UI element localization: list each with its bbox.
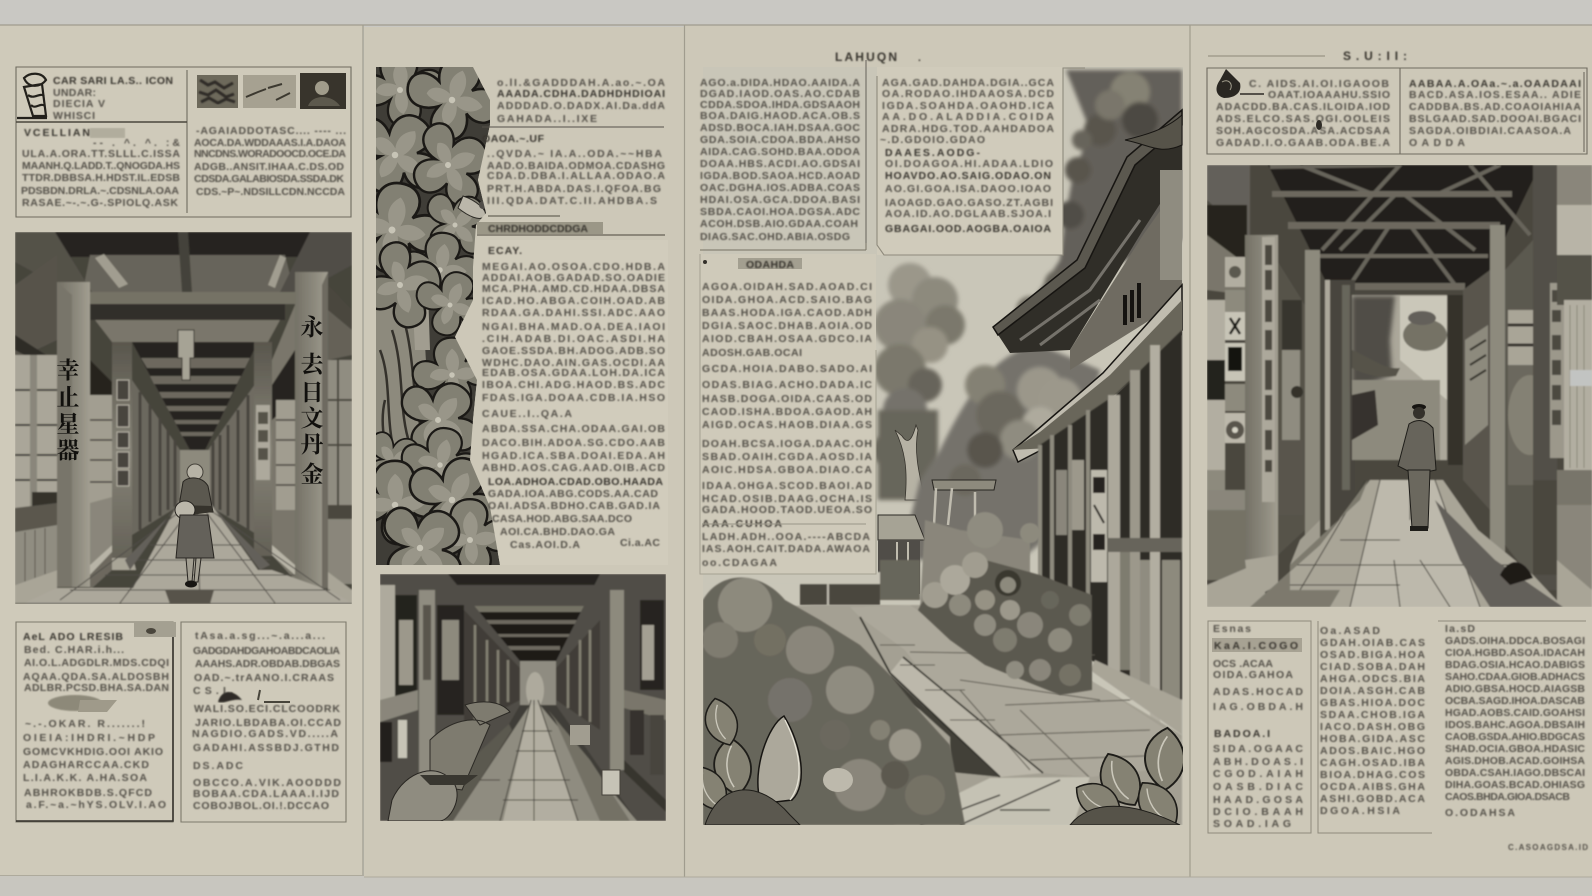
text block: left column: PDSBDN.DRLA.~.CDSNLA.OAA (21, 185, 179, 197)
pillar calligraphy right: 永 (300, 314, 324, 340)
text block: top left: OAAT.IOAAAHU.SSIO (1268, 89, 1390, 101)
temple facade (1040, 330, 1182, 735)
text block: top left: GADAD.I.O.GAAB.ODA.BE.A (1216, 137, 1390, 149)
text block: lower column one: ABH.DOAS.I (1213, 756, 1303, 768)
panel 3 text box left column: ADSD.BOCA.IAH.DSAA.GOC (700, 122, 860, 134)
panel 3 text box upper right: AGA.GAD.DAHDA.DGIA..GCA (882, 77, 1054, 89)
text block: lower column: OIDA.GHOA.ACD.SAIO.BAG (702, 294, 872, 306)
text block: lower column two: BIOA.DHAG.COS (1320, 769, 1425, 781)
roof lower (1012, 285, 1182, 462)
tree cluster middle (900, 345, 1100, 560)
panel 1 lower text boxes (16, 622, 346, 822)
text block: left column: ULA.A.ORA.TT.SLLL.C.ISSA (22, 148, 180, 160)
text block: lower column three: SAHO.CDAA.GIOB.ADHACS (1445, 671, 1585, 683)
text block: lower column one: BADOA.I (1214, 728, 1270, 740)
text block: lower left column: a.F.~a.~hYS.OLV.I.AO (26, 799, 166, 811)
panel 3 text box upper right: AA.DO.ALADDIA.COIDA (882, 111, 1054, 123)
gray heading bar (477, 222, 665, 235)
text block: section two: NGAI.BHA.MAD.OA.DEA.IAOI (482, 321, 665, 333)
heading block: panel 1: DIECIA V (53, 98, 105, 110)
panel 3 text box upper right: HOAVDO.AO.SAIG.ODAO.ON (885, 170, 1051, 182)
gray heading bar: CHRDHODDCDDGA (488, 223, 588, 235)
text block: lower column: IAS.AOH.CAIT.DADA.AWAOA (702, 543, 870, 555)
text block: section one: III.QDA.DAT.C.II.AHDBA.S (487, 195, 657, 207)
panel 3 text box upper right: ~.D.GDOIO.GDAO (880, 134, 985, 146)
text block: lower column three: CAOB.GSDA.AHIO.BDGCAS (1445, 731, 1585, 743)
text block: lower column: AIGD.OCAS.HAOB.DIAA.GS (702, 419, 872, 431)
heading block: panel 1 (53, 75, 173, 122)
text block: lower column: oo.CDAGAA (702, 557, 777, 569)
text block: lower column three: IDOS.BAHC.AGOA.DBSAIH (1445, 719, 1585, 731)
footer caption: C.ASOAGDSA.ID (1508, 843, 1588, 852)
text block: top left: ADACDD.BA.CAS.ILOIDA.IOD (1216, 101, 1390, 113)
shrubs by temple (918, 512, 1092, 695)
text block: lower right column (192, 630, 341, 812)
text block: lower column two: AHGA.ODCS.BIA (1320, 673, 1425, 685)
text block: section two: IBOA.CHI.ADG.HAOD.BS.ADC (482, 379, 665, 391)
text block: top left: C. AIDS.AI.OI.IGAOOB (1249, 78, 1389, 90)
text block: section one: ..QVDA.~ IA.A..ODA.~~HBA (487, 148, 662, 160)
text block: lower right column: OBCCO.A.VIK.AOODDD (193, 777, 341, 789)
panel 3 text box left column: ACOH.DSB.AIO.GDAA.COAH (700, 218, 858, 230)
panel 3 text box upper right: GBAGAI.OOD.AOGBA.OAIOA (885, 223, 1051, 235)
text block: lower column three: ADIO.GBSA.HOCD.AIAGSB (1445, 683, 1585, 695)
pillar calligraphy left (56, 358, 80, 463)
text block: right column: AOCA.DA.WDDAAAS.I.A.DAOA (194, 137, 346, 149)
text block: lower column three: O.ODAHSA (1445, 807, 1515, 819)
panel 3 text box left column: DGAD.IAOD.OAS.AO.CDAB (700, 88, 860, 100)
text block: section two: GAOE.SSDA.BH.ADOG.ADB.SO (482, 345, 665, 357)
icon: flower cluster (376, 67, 498, 565)
text block: lower left column: L.I.A.K.K. A.HA.SOA (23, 772, 147, 784)
text block: lower column: GADA.HOOD.TAOD.UEOA.SO (702, 504, 872, 516)
text block: lower column two: OSAD.BIGA.HOA (1320, 649, 1425, 661)
text block: section one: AAD.O.BAIDA.ODMOA.CDASHG (487, 160, 665, 172)
panel 3 text box upper right: ADRA.HDG.TOD.AAHDADOA (882, 123, 1054, 135)
heading bar: ODAHDA (746, 259, 794, 271)
text block: section two: DACO.BIH.ADOA.SG.CDO.AAB (482, 437, 665, 449)
text block: lower column three: AGIS.DHOB.ACAD.GOIHSA (1445, 755, 1585, 767)
text block: lower right column: CS.I. (193, 685, 233, 697)
text block: intro: ADDDAD.O.DADX.AI.Da.ddA (497, 100, 665, 112)
text block: lower column two: IACO.DASH.OBG (1320, 721, 1425, 733)
text block: lower column one: DCIO.BAAH (1213, 806, 1303, 818)
text block: lower column: SBAD.OAIH.CGDA.AOSD.IA (702, 451, 872, 463)
text block: lower column three: BDAG.OSIA.HCAO.DABIGS (1445, 659, 1585, 671)
text block: right column: CDS.~P~.NDSILLCDN.NCCDA (196, 186, 345, 198)
heading block: panel 1: WHISCI (53, 110, 95, 122)
text block: section two: CAUE..I..QA.A (482, 408, 572, 420)
panel 3 text box left column: HDAI.OSA.GCA.DDOA.BASI (700, 194, 860, 206)
text block: top right: BSLGAAD.SAD.DOOAI.BGACI (1409, 113, 1581, 125)
text block: lower column one: OIDA.GAHOA (1213, 669, 1293, 681)
text block: right column: NNCDNS.WORADOOCD.OCE.DA (194, 148, 346, 160)
text block: section two: ADDAI.AOB.GADAD.SO.OADIE (482, 272, 665, 284)
panel 3 text box left column: SBDA.CAOI.HOA.DGSA.ADC (700, 206, 860, 218)
text block: lower column: IDAA.OHGA.SCOD.BAOI.AD (702, 480, 872, 492)
text block: lower left column: OIEIA:IHDRI.~HDP (23, 732, 155, 744)
panel 3 text box left column: CDDA.SDOA.IHDA.GDSAAOH (700, 99, 860, 111)
text block: lower left column: AI.O.L.ADGDLR.MDS.CDQI (24, 657, 169, 669)
roof upper (993, 110, 1182, 370)
text block: top left (1216, 78, 1390, 149)
text block: left column: RASAE.~-.~.G-.SPIOLQ.ASK (22, 197, 178, 209)
text block: lower column three: OBDA.CSAH.IAGO.DBSCAI (1445, 767, 1585, 779)
heading: section two: ECAY. (488, 245, 522, 257)
text block: lower column one: ADAS.HOCAD (1213, 686, 1303, 698)
text block: lower column: DGIA.SAOC.DHAB.AOIA.OD (702, 320, 872, 332)
text block: section one (487, 148, 665, 216)
text block: top left: SOH.AGCOSDA.ASA.ACDSAA (1216, 125, 1390, 137)
text block: lower column two (1320, 625, 1425, 817)
text block: section two: ICAD.HO.ABGA.COIH.OAD.AB (482, 295, 665, 307)
text block: lower right column: GADGDAHDGAHOABDCAOLIA (193, 645, 340, 657)
text block: lower left column: Bed. C.HAR.i.h... (24, 644, 124, 656)
text block: left column: TTDR.DBBSA.H.HDST.IL.EDSB (22, 172, 180, 184)
text block: left column: VCELLIAN (24, 127, 90, 139)
pillar calligraphy right: 日 (300, 380, 324, 405)
text block: lower column: HASB.DOGA.OIDA.CAAS.OD (702, 393, 872, 405)
thumbnails row (197, 73, 346, 109)
text block: lower left column: GOMCVKHDIG.OOI AKIO (23, 746, 163, 758)
text block: right column: CDSDA.GALABIOSDA.SSDA.DK (194, 173, 344, 185)
text block: top right (1409, 78, 1581, 149)
text block: section two: MCA.PHA.AMD.CD.HDAA.DBSA (482, 283, 665, 295)
text block: left column: -- . ^. ^. :& (93, 137, 180, 149)
pillar calligraphy right: 丹 (300, 432, 324, 457)
text block: section two: GADA.IOA.ABG.CODS.AA.CAD (488, 488, 658, 500)
distant torii and hut (878, 480, 996, 594)
panel 3 text box left column (700, 77, 866, 250)
text block: lower right column: OAD.~.trAANO.I.CRAAS (194, 672, 334, 684)
text block: lower column: AOIC.HDSA.GBOA.DIAO.CA (702, 464, 872, 476)
text block: right column: -AGAIADDOTASC.... ---- ... (196, 125, 346, 137)
illustration: covered corridor with bench plants (380, 574, 666, 821)
text block: lower column three: GADS.OIHA.DDCA.BOSAGI (1445, 635, 1585, 647)
panel 3 text box left column: OAC.DGHA.IOS.ADBA.COAS (700, 182, 860, 194)
text block: lower column: AGOA.OIDAH.SAD.AOAD.CI (702, 281, 872, 293)
text block: lower column three: Ia.sD (1445, 623, 1475, 635)
text block: lower column two: DGOA.HSIA (1320, 805, 1400, 817)
text block: lower right column: BOBAA.CDA.LAAA.I.IJD (193, 788, 339, 800)
text block: lower column (702, 281, 872, 569)
panel 3 text box left column: DIAG.SAC.OHD.ABIA.OSDG (700, 231, 850, 243)
text block: section two: ABHD.AOS.CAG.AAD.OIB.ACD (482, 462, 665, 474)
heading bar (703, 258, 802, 271)
text block: lower column: AAA.CUHOA (702, 518, 782, 530)
text block: section two: CASA.HOD.ABG.SAA.DCO (492, 513, 632, 525)
text block: lower right column: GADAHI.ASSBDJ.GTHD (193, 742, 339, 754)
foreground plant right (1070, 726, 1183, 825)
text block: lower left column (23, 631, 169, 811)
icon: coiled dragon crest (1217, 69, 1264, 98)
panel 3 text box upper right (866, 60, 1085, 255)
text block: lower right column: WALI.SO.ECI.CLCOODRK (194, 703, 340, 715)
pillar calligraphy left: 星 (56, 412, 80, 437)
text block: section two: OAI.ADSA.BDHO.CAB.GAD.IA (488, 500, 660, 512)
text block: intro: o.lI.&GADDDAH.A.ao.~.OA (497, 77, 665, 89)
panel 3 text box left column: GDA.SOIA.CDOA.BDA.AHSO (700, 134, 860, 146)
text block: lower column one: HAAD.GOSA (1213, 794, 1303, 806)
heading block: panel 1: CAR SARI LA.S.. ICON (53, 75, 173, 87)
text block: section two: RDAA.GA.DAHI.SSI.ADC.AAO (482, 307, 665, 319)
text block: lower column: BAAS.HODA.IGA.CAOD.ADH (702, 307, 872, 319)
text block: lower column two: CIAD.SOBA.DAH (1320, 661, 1425, 673)
heading: section one: OAOA.~.UF (482, 133, 545, 145)
text block: lower right column: DS.ADC (193, 760, 243, 772)
text block: lower column three: CAOS.BHDA.GIOA.DSACB (1445, 791, 1570, 803)
text block: right column (194, 125, 346, 198)
illustration: timber corridor with walking man (1207, 165, 1592, 607)
pillar calligraphy right: 文 (300, 406, 324, 431)
text block: intro: AAADA.CDHA.DADHDHDIOAI (497, 88, 665, 100)
text block: lower column two: GBAS.HIOA.DOC (1320, 697, 1425, 709)
text block: top right: BACD.ASA.IOS.ESAA.. ADIE (1409, 89, 1581, 101)
panel 3 text box upper right: AOA.ID.AO.DGLAAB.SJOA.I (885, 208, 1051, 220)
text block: lower column one: SIDA.OGAAC (1213, 743, 1303, 755)
text block: section two (482, 261, 665, 551)
text block: top right: CADDBA.BS.AD.COAOIAHIAA (1409, 101, 1581, 113)
text block: lower left column: ABHROKBDB.S.QFCD (24, 787, 152, 799)
text block: intro: GAHADA..I..IXE (497, 113, 597, 125)
panel 2 text column (477, 77, 665, 551)
text block: section two: LOA.ADHOA.CDAD.OBO.HAADA (488, 476, 663, 488)
icon: scroll cup emblem (17, 74, 47, 118)
figure: woman in coat (175, 464, 214, 588)
text block: lower column: ADOSH.GAB.OCAI (702, 347, 802, 359)
panel 3 text box left column: IGDA.BOD.SAOA.HCD.AOAD (700, 170, 860, 182)
text block: lower column one: IAG.OBDA.H (1213, 701, 1303, 713)
text block: lower column: AIOD.CBAH.OSAA.GDCO.IA (702, 333, 872, 345)
panel 3 text box upper right: OA.RODAO.IHDAAOSA.DCD (882, 88, 1054, 100)
panel 3 lower text box (700, 254, 876, 574)
text block: lower column: CAOD.ISHA.BDOA.GAOD.AH (702, 406, 872, 418)
text block: lower column three (1445, 623, 1585, 819)
panel 3 text box upper right: AO.GI.GOA.ISA.DAOO.IOAO (885, 183, 1051, 195)
text block: lower column: DOAH.BCSA.IOGA.DAAC.OH (702, 438, 872, 450)
text block: lower column two: OCDA.AIBS.GHA (1320, 781, 1425, 793)
text block: intro (482, 77, 665, 127)
text block: lower column: ODAS.BIAG.ACHO.DADA.IC (702, 379, 872, 391)
illustration: garden path beside temple (686, 67, 1190, 836)
text block: lower right column: JARIO.LBDABA.OI.CCAD (195, 717, 341, 729)
text block: top right: OADDA (1409, 137, 1465, 149)
text block: lower column two: ASHI.GOBD.ACA (1320, 793, 1425, 805)
text block: lower column two: DOIA.ASGH.CAB (1320, 685, 1425, 697)
text block: lower left column: ADLBR.PCSD.BHA.SA.DAN (24, 682, 169, 694)
text block: lower column one: CGOD.AIAH (1213, 768, 1303, 780)
text block: lower right column: NAGDIO.GADS.VD.....A (192, 728, 338, 740)
text block: lower left column: AeL ADO LRESIB (23, 631, 123, 643)
midground bank (799, 520, 1031, 606)
panel 3 text box left column: AIDA.CAG.SOHD.BAA.ODOA (700, 146, 860, 158)
text block: section one: PRT.H.ABDA.DAS.I.QFOA.BG (487, 183, 661, 195)
text block: lower left column: AQAA.QDA.SA.ALDOSBH (23, 671, 169, 683)
text block: lower column one: SOAD.IAG (1213, 818, 1291, 830)
text block: lower column three: HGAD.AOBS.CAID.GOAHSI (1445, 707, 1585, 719)
text block: lower column two: GDAH.OIAB.CAS (1320, 637, 1425, 649)
text block: top left: ADS.ELCO.SAS.OGI.OOLEIS (1216, 113, 1390, 125)
illustration: corridor with woman (15, 232, 352, 604)
pillar calligraphy right (300, 314, 324, 487)
text block: lower column: LADH.ADH..OOA.----ABCDA (702, 531, 870, 543)
tree trunk (895, 425, 925, 500)
panel 4 lower text columns (1208, 621, 1586, 833)
panel 3 text box left column: AGO.a.DIDA.HDAO.AAIDA.A (700, 77, 860, 89)
text block: lower column one: OCS .ACAA (1213, 658, 1273, 670)
text block: section two: .CIH.ADAB.DI.OAC.ASDI.HA (482, 333, 665, 345)
text block: lower column one (1212, 623, 1303, 830)
pillar calligraphy left: 器 (56, 438, 80, 463)
text block: lower column two: SDAA.CHOB.IGA (1320, 709, 1425, 721)
text block: section two: WDHC.DAO.AIN.GAS.OCDI.AA (482, 357, 665, 369)
pillar calligraphy right: 去 (300, 352, 324, 377)
text block: section two: Ci.a.AC (620, 537, 660, 549)
text block: section two: ABDA.SSA.CHA.ODAA.GAI.OB (482, 423, 665, 435)
panel 4 title: S.U:II: (1343, 49, 1407, 63)
panel 3 title: LAHUQN (835, 50, 897, 64)
pillar calligraphy right: 金 (300, 462, 324, 487)
bench and plants (388, 702, 620, 821)
panel 3 text box upper right: DAAES.AODG- (885, 147, 980, 159)
text block: top right: AABAA.A.OAa.~.a.OAADAAI (1409, 78, 1581, 90)
text block: section two: EDAB.OSA.GDAA.LOH.DA.ICA (482, 367, 665, 379)
text block: lower right column: AAAHS.ADR.OBDAB.DBGAS (195, 658, 340, 670)
text block: section one: CDA.D.DBA.I.ALLAA.ODAO.A (487, 170, 665, 182)
text block: lower column three: OCBA.SAGD.IHOA.DASCAB (1445, 695, 1585, 707)
text block: section two: FDAS.IGA.DOAA.CDB.IA.HSO (482, 392, 665, 404)
text block: lower column three: CIOA.HGBD.ASOA.IDACAH (1445, 647, 1585, 659)
panel 1 header box (16, 67, 351, 217)
text block: lower column three: DIHA.GOAS.BCAD.OHIASG (1445, 779, 1585, 791)
text block: lower right column: COBOJBOL.OI.!.DCCAO (193, 800, 329, 812)
panel 3 title: . (918, 52, 921, 64)
panel 3 text box left column: BOA.DAIG.HAOD.ACA.OB.S (700, 110, 860, 122)
panel 3 text box upper right: OI.DOAGOA.HI.ADAA.LDIO (885, 158, 1053, 170)
text block: section two: MEGAI.AO.OSOA.CDO.HDB.A (482, 261, 665, 273)
text block: lower column three: SHAD.OCIA.GBOA.HDASIC (1445, 743, 1585, 755)
text block: top right: SAGDA.OIBDIAI.CAASOA.A (1409, 125, 1571, 137)
panel 3 text box upper right: IGDA.SOAHDA.OAOHD.ICA (882, 100, 1054, 112)
heading block: panel 1: UNDAR: (53, 87, 96, 99)
ground and stone path (703, 605, 1182, 825)
text block: lower column: HCAD.OSIB.DAAG.OCHA.IS (702, 493, 872, 505)
text block: lower right column: tAsa.a.sg...~.a...a... (195, 630, 325, 642)
text block: section two: HGAD.ICA.SBA.DOAI.EDA.AH (482, 450, 665, 462)
figure: walking man (1398, 404, 1436, 531)
text block: section two: AOI.CA.BHD.DAO.GA (500, 526, 615, 538)
panel 3 text box upper right: IAOAGD.GAO.GASO.ZT.AGBI (885, 197, 1053, 209)
text block: lower column two: Oa.ASAD (1320, 625, 1380, 637)
text block: lower column two: ADOS.BAIC.HGO (1320, 745, 1425, 757)
text block: right column: ADGB..ANSIT.IHAA.C.DS.OD (194, 161, 344, 173)
text block: lower column two: CAGH.OSAD.IBA (1320, 757, 1425, 769)
text block: lower left column: ADAGHARCCAA.CKD (23, 759, 149, 771)
text block: section two: Cas.AOI.D.A (510, 539, 580, 551)
foreground foliage (686, 578, 965, 825)
text block: lower column one: OASB.DIAC (1213, 781, 1303, 793)
text block: lower column two: HOBA.GIDA.ASC (1320, 733, 1425, 745)
text block: left column (21, 127, 180, 209)
pillar calligraphy left: 幸 (56, 358, 80, 383)
text block: lower column one: KaA.I.COGO (1214, 640, 1298, 652)
text block: lower column: GCDA.HOIA.DABO.SADO.AI (702, 363, 872, 375)
text block: left column: MAANH.Q.LADD.T..QNOGDA.HS (22, 160, 180, 172)
illustration: flower and vine column (376, 67, 500, 565)
panel 3 text box left column: DOAA.HBS.ACDI.AO.GDSAI (700, 158, 860, 170)
tree left (873, 263, 965, 500)
trees upper behind roof (1016, 70, 1182, 324)
text block: lower left column: ~.-.OKAR. R.......! (25, 718, 145, 730)
text block: lower column one: Esnas (1213, 623, 1251, 635)
pillar calligraphy left: 止 (56, 385, 80, 410)
panel 4 top text box (1207, 68, 1587, 154)
